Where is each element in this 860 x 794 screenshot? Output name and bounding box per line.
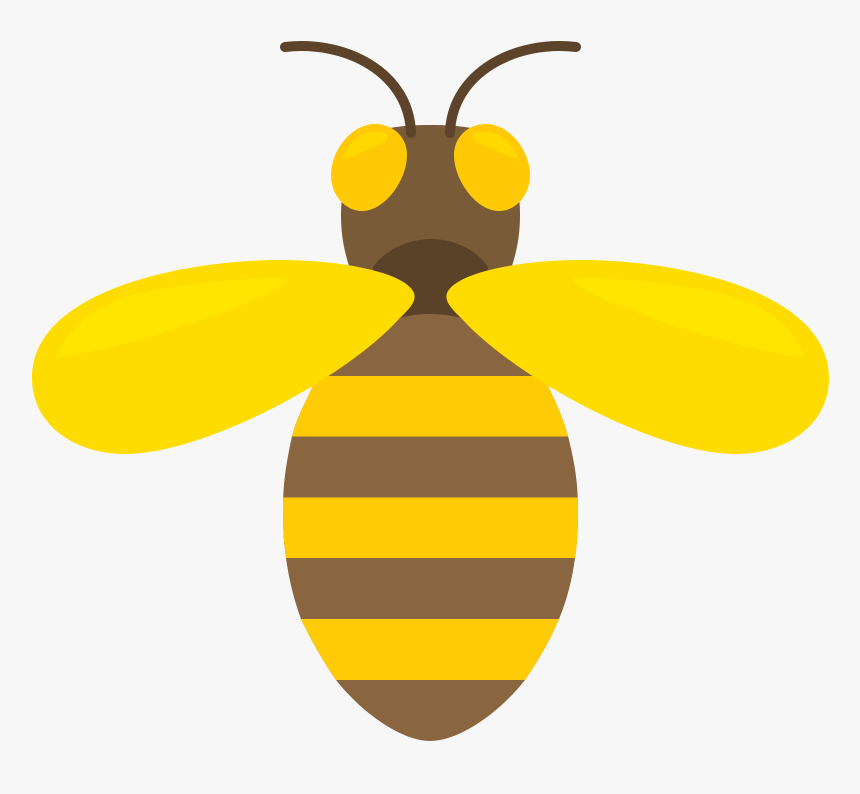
abdomen <box>270 314 590 741</box>
head <box>341 125 520 292</box>
antenna: right <box>450 46 576 133</box>
eye: right <box>454 124 530 211</box>
wing: right <box>446 260 829 454</box>
wing: left <box>32 260 415 454</box>
neck <box>373 239 488 326</box>
eye: left <box>331 124 407 211</box>
antenna: left <box>285 46 411 133</box>
